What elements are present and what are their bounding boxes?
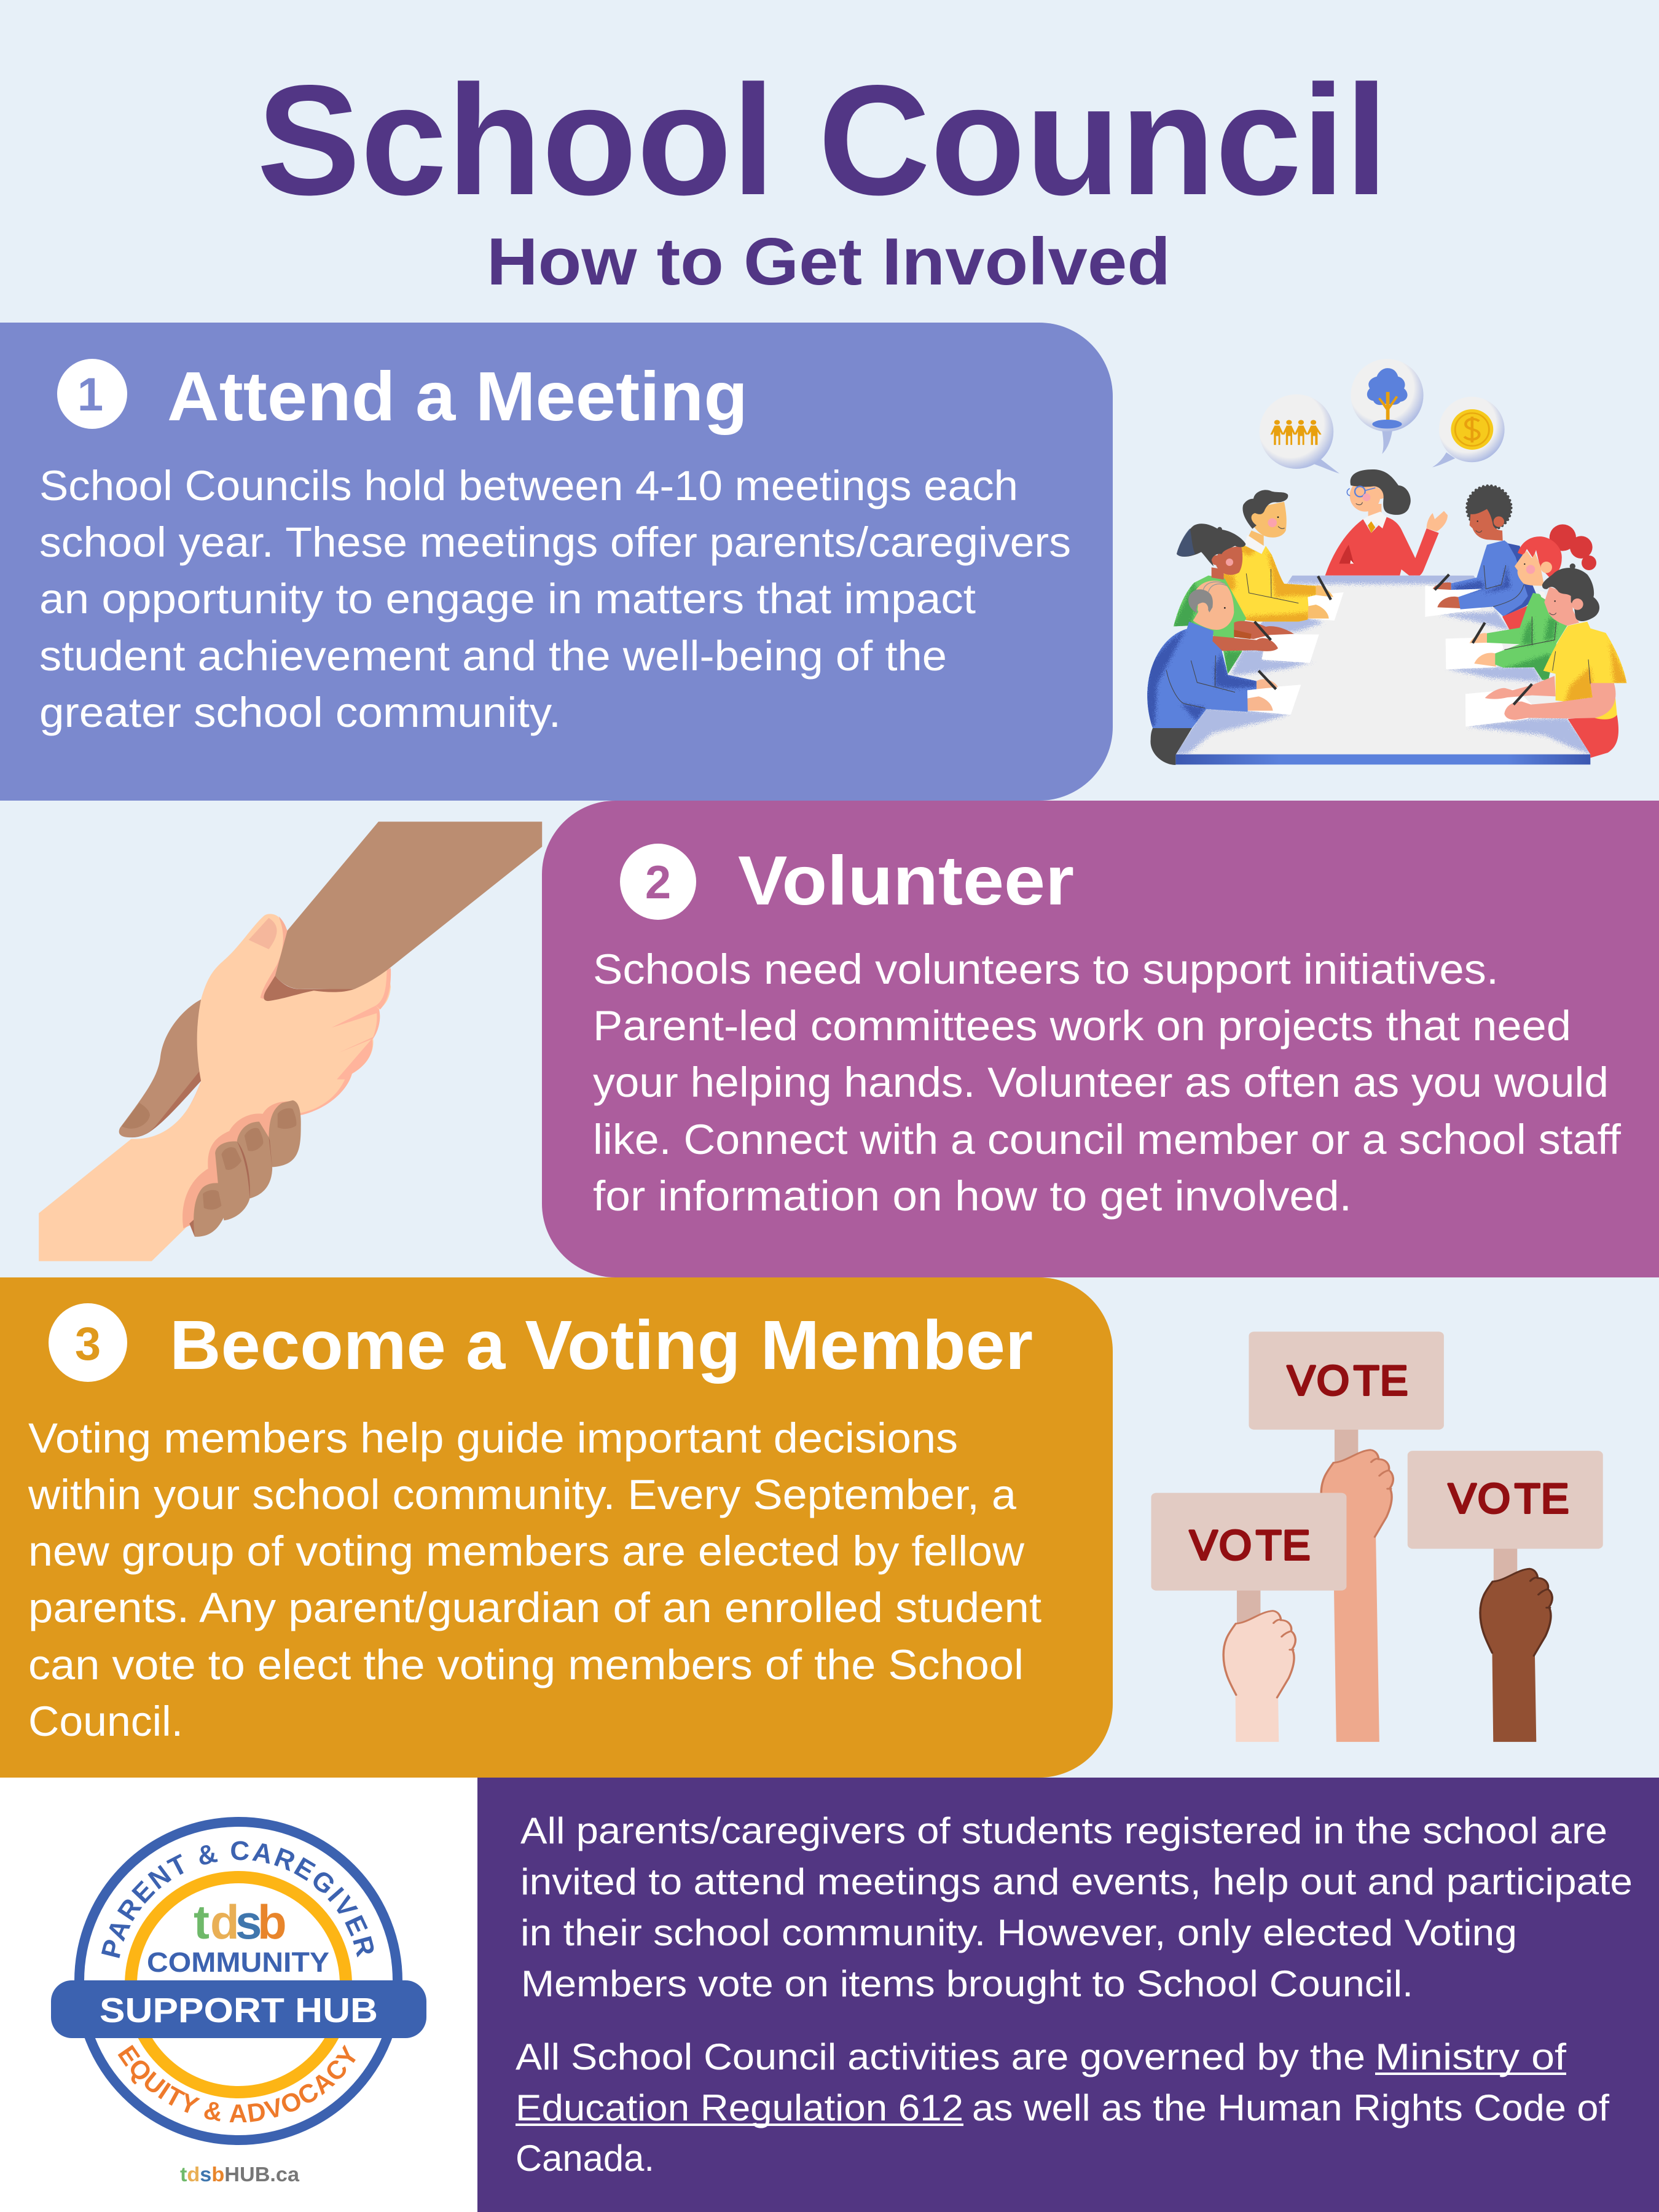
body text: attend a meeting: [39, 462, 1071, 736]
heading: attend a meeting: Attend a Meeting: [167, 358, 748, 435]
body text: volunteer: for information on how to get involved.: [593, 1172, 1352, 1220]
peach arm and hand: [39, 914, 391, 1261]
heading: volunteer: Volunteer: [738, 842, 1074, 919]
title: School Council: [257, 53, 1388, 228]
person: red-haired woman: [1470, 524, 1596, 681]
table: [1172, 571, 1593, 764]
paper sheets: [1246, 586, 1532, 727]
logo: support hub badge: [51, 1817, 426, 2145]
footer paragraph 1: invited to attend meetings and events, help out and participate: [520, 1861, 1633, 1902]
person: woman with ponytail: [1172, 524, 1294, 676]
subtitle: How to Get Involved: [487, 224, 1171, 299]
number badge 2: 2: [645, 857, 671, 909]
speech bubbles: [1260, 359, 1505, 474]
person: woman in yellow: [1485, 563, 1628, 758]
person: older man in blue: [1143, 581, 1278, 765]
illustration: vote signs: [1151, 1332, 1603, 1742]
footer paragraph 1: [520, 1810, 1633, 2004]
sign: right vote: VOTE: [1448, 1475, 1569, 1522]
speech bubble: tree: [1351, 359, 1424, 454]
panel: volunteer: [542, 801, 1659, 1277]
body text: volunteer: Parent-led committees work on projects that need: [593, 1002, 1571, 1049]
sign: top vote: VOTE: [1287, 1357, 1408, 1404]
footer paragraph 2: Education Regulation 612: [516, 2087, 963, 2128]
wordmark: tdsb: b: [257, 1895, 287, 1949]
body text: voting member: Voting members help guide important decisions: [28, 1414, 958, 1462]
number badge 1: [57, 359, 127, 429]
illustration: helping hands: [39, 822, 542, 1261]
label: support hub: SUPPORT HUB: [100, 1991, 378, 2030]
sign: top vote: [1249, 1332, 1444, 1742]
arc text: parent and caregiver: PARENT & CAREGIVER: [101, 1841, 374, 1958]
body text: attend a meeting: greater school community.: [39, 689, 561, 736]
number badge 3: 3: [75, 1318, 101, 1370]
brown hand back: [119, 1000, 201, 1137]
body text: attend a meeting: school year. These meetings offer parents/caregivers: [39, 519, 1071, 566]
website link: tdsbHUB.ca: tdsbHUB.ca: [180, 2163, 300, 2186]
body text: voting member: Council.: [28, 1698, 183, 1745]
footer paragraph 2: Canada.: [516, 2138, 654, 2179]
body text: voting member: can vote to elect the voting members of the School: [28, 1641, 1024, 1688]
arc text: equity and advocacy: EQUITY & ADVOCACY: [118, 2045, 356, 2122]
body text: attend a meeting: student achievement and the well-being of the: [39, 632, 947, 680]
footer paragraph 1: All parents/caregivers of students registered in the school are: [520, 1810, 1607, 1851]
brown arm gripping: [264, 822, 542, 1001]
label: community: COMMUNITY: [147, 1947, 329, 1978]
footer paragraph 1: in their school community. However, only elected Voting: [520, 1912, 1517, 1953]
brown fingers: [189, 1100, 301, 1237]
body text: volunteer: your helping hands. Volunteer as often as you would: [593, 1059, 1609, 1106]
right side people: [1433, 486, 1628, 758]
wordmark: tdsb: t: [194, 1895, 210, 1949]
wordmark: tdsb: s: [235, 1895, 262, 1949]
footer paragraph 2: Ministry of: [1375, 2036, 1566, 2077]
number badge 1: 1: [77, 369, 103, 421]
illustration: people meeting around a table: [1143, 359, 1628, 765]
sign: left vote: VOTE: [1190, 1522, 1310, 1569]
person: man with curly hair: [1433, 486, 1537, 616]
footer paragraph 1: Members vote on items brought to School Council.: [521, 1963, 1413, 2004]
speech bubble: coin: [1432, 397, 1505, 468]
footer paragraph 2: as well as the Human Rights Code of: [972, 2087, 1609, 2128]
person: presenter in red: [1325, 469, 1448, 579]
heading: become a voting member: Become a Voting Member: [170, 1306, 1033, 1384]
body text: voting member: new group of voting members are elected by fellow: [28, 1528, 1024, 1575]
sign: left vote: [1151, 1493, 1346, 1742]
number badge 3: [49, 1303, 127, 1382]
body text: voting member: parents. Any parent/guardian of an enrolled student: [28, 1584, 1041, 1631]
speech bubble: people: [1260, 394, 1339, 474]
footer paragraph 2: [516, 2036, 1609, 2179]
person: man in yellow: [1221, 490, 1333, 625]
body text: attend a meeting: an opportunity to engage in matters that impact: [39, 575, 976, 622]
meeting scene: [1143, 469, 1628, 765]
footer paragraph 2: All School Council activities are governed by the: [516, 2036, 1365, 2077]
body text: volunteer: [593, 946, 1622, 1220]
panel: footer information: [477, 1778, 1659, 2212]
panel: become a voting member: [0, 1277, 1113, 1778]
sign: right vote: [1408, 1451, 1603, 1742]
wordmark: tdsb: d: [210, 1895, 240, 1949]
body text: volunteer: like. Connect with a council member or a school staff: [593, 1116, 1622, 1163]
body text: voting member: [28, 1414, 1041, 1745]
body text: attend a meeting: School Councils hold between 4-10 meetings each: [39, 462, 1018, 509]
panel: attend a meeting: [0, 323, 1113, 801]
body text: volunteer: Schools need volunteers to support initiatives.: [593, 946, 1499, 993]
number badge 2: [620, 844, 696, 920]
body text: voting member: within your school community. Every September, a: [28, 1471, 1017, 1518]
panel: logo background: [0, 1778, 478, 2212]
